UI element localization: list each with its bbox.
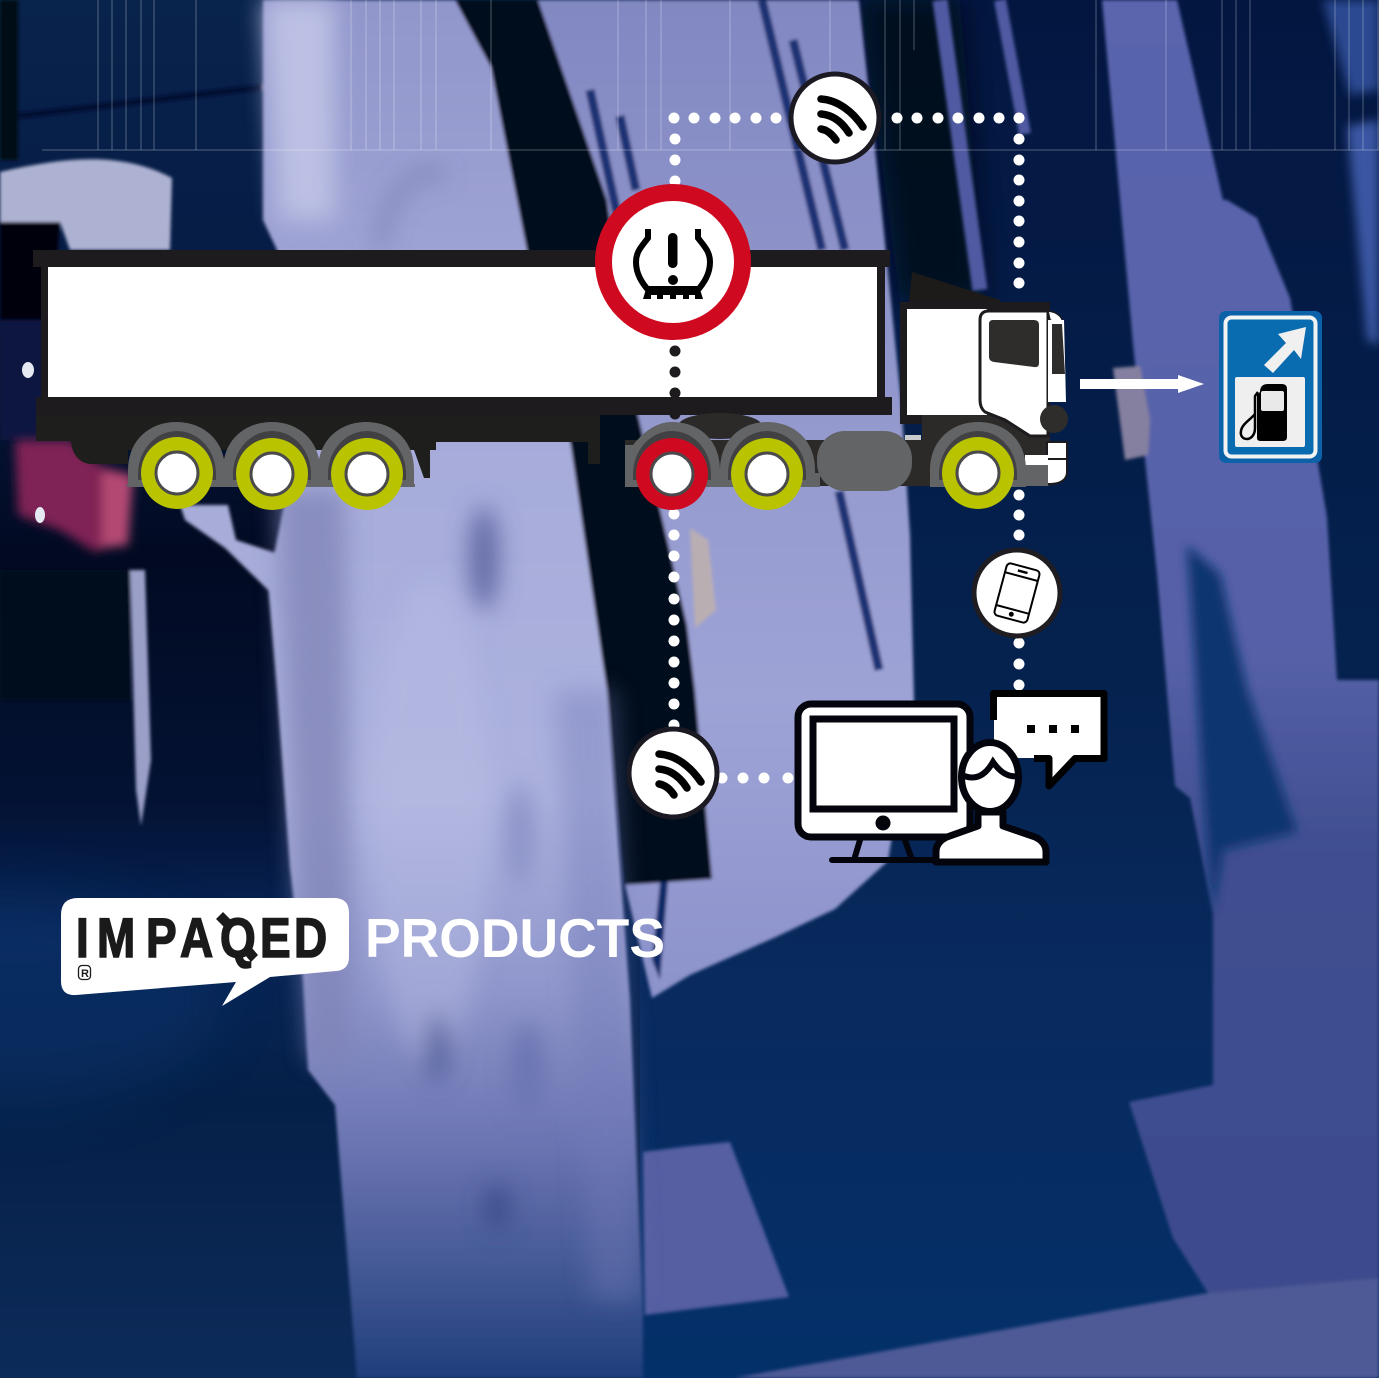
cab door — [980, 311, 1048, 436]
second tyre — [538, 0, 914, 998]
steering wheel — [942, 437, 1014, 509]
trailer wheel 1 — [141, 437, 213, 509]
third tyre — [1102, 0, 1379, 1293]
icon: wireless signal top — [791, 74, 879, 162]
alert wheel in red — [636, 438, 708, 510]
bracket band below the trailer — [180, 505, 285, 615]
speech bubble — [994, 692, 1105, 788]
dark wedge between wheel and lower body — [1187, 545, 1297, 914]
white dotted connector: top loop — [668, 112, 1024, 288]
pale cloth block — [0, 159, 172, 250]
left edge dark stripe and line in the cab — [0, 0, 18, 160]
dark stripes — [590, 0, 879, 670]
trailer fenders — [127, 422, 415, 487]
heading: products: PRODUCTS — [365, 907, 665, 969]
icon: fuel station road sign — [1219, 311, 1322, 463]
fuel tank — [817, 431, 912, 491]
person — [936, 742, 1046, 862]
tractor fenders — [625, 422, 1026, 487]
logo: Impaqed speech bubble: R — [81, 968, 89, 980]
thin vertical scan lines at the top — [42, 0, 1379, 150]
white dotted connector: lower links — [668, 490, 1024, 784]
monitor — [798, 704, 970, 860]
trailer wheel 3 — [331, 438, 403, 510]
trailer wheel 2 — [236, 438, 308, 510]
arrow to fuel station sign — [1080, 375, 1204, 393]
icon: tyre pressure warning — [595, 184, 751, 340]
black dotted connector over trailer — [670, 346, 680, 420]
black gap between the tyres — [455, 0, 712, 885]
rear tyre — [263, 0, 643, 1378]
ground strip and distant patch — [734, 1278, 1379, 1378]
logo: Impaqed speech bubble: IMPAQED — [76, 907, 327, 969]
icon: operator at monitor with speech bubble — [798, 692, 1105, 862]
icon: wireless signal lower — [629, 729, 717, 817]
truck: tractor unit — [625, 272, 1068, 510]
truck: trailer — [33, 250, 892, 510]
logo: Impaqed speech bubble — [61, 898, 349, 1006]
drive wheel — [731, 438, 803, 510]
icon: smartphone — [974, 550, 1060, 636]
rear light glow — [15, 440, 133, 552]
